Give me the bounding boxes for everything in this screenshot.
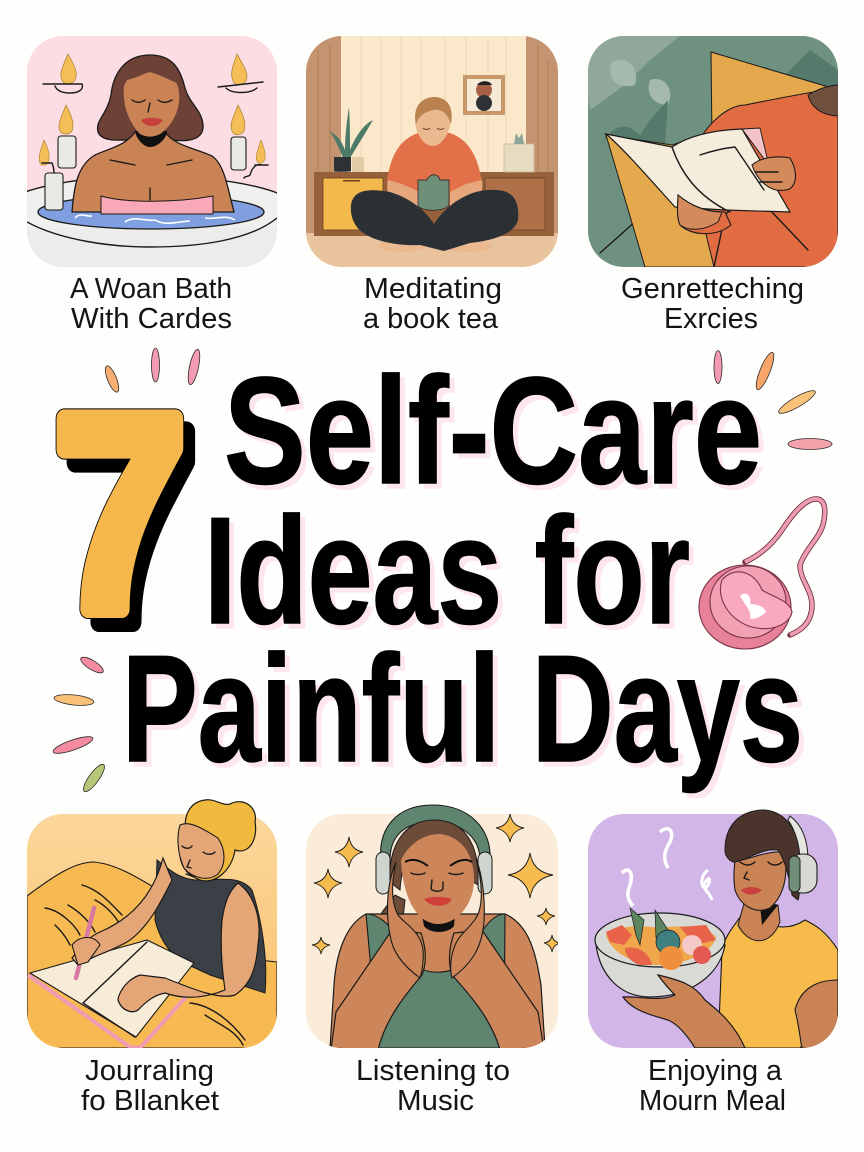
label: reading bbox=[621, 273, 804, 335]
panel: meditating bbox=[306, 36, 558, 335]
panel: bath with candles bbox=[27, 36, 277, 328]
label: journaling: Jourraling bbox=[85, 1055, 214, 1087]
big number 7: 7 bbox=[54, 358, 186, 668]
illustration: woman with headphones bbox=[306, 805, 560, 1050]
label: listening: Listening to bbox=[356, 1055, 510, 1087]
title shadow bbox=[127, 351, 808, 799]
label: journaling bbox=[81, 1055, 219, 1117]
title block bbox=[52, 346, 832, 799]
label: bath: With Cardes bbox=[71, 303, 232, 335]
icon: uterus bbox=[699, 499, 825, 649]
title text: Ideas for bbox=[204, 486, 690, 656]
big number 7: 7 bbox=[65, 371, 197, 681]
candles bbox=[39, 54, 268, 210]
label: listening bbox=[356, 1055, 510, 1117]
label: reading: Genretteching bbox=[621, 273, 804, 305]
label: listening: Music bbox=[397, 1085, 474, 1117]
illustration: person meditating on floor bbox=[306, 36, 558, 269]
label: meal: Mourn Meal bbox=[639, 1085, 786, 1117]
label: bath bbox=[70, 273, 232, 335]
label: journaling: fo Bllanket bbox=[81, 1085, 219, 1117]
panel: reading bbox=[588, 36, 840, 335]
illustration: journaling on blanket bbox=[27, 800, 277, 1048]
panel: journaling bbox=[27, 800, 277, 1117]
big number 7: 7 bbox=[54, 358, 186, 668]
person bbox=[387, 133, 482, 205]
title text bbox=[122, 346, 803, 794]
illustration: person holding a bowl bbox=[588, 810, 838, 1048]
illustration: reading a book bbox=[588, 36, 840, 267]
label: meal bbox=[639, 1055, 786, 1117]
illustration: woman in bath bbox=[27, 36, 277, 267]
label: meditating bbox=[363, 273, 502, 335]
label: meal: Enjoying a bbox=[648, 1055, 782, 1087]
panel: enjoying a meal bbox=[588, 810, 838, 1117]
title shadow: Ideas for bbox=[209, 491, 695, 661]
label: bath: A Woan Bath bbox=[70, 273, 232, 305]
label: meditating: a book tea bbox=[363, 303, 498, 335]
label: meditating: Meditating bbox=[364, 273, 502, 305]
woman bbox=[98, 55, 203, 141]
sparkle dashes bbox=[52, 348, 832, 794]
label: reading: Exrcies bbox=[664, 303, 758, 335]
panel: listening to music bbox=[306, 805, 560, 1117]
